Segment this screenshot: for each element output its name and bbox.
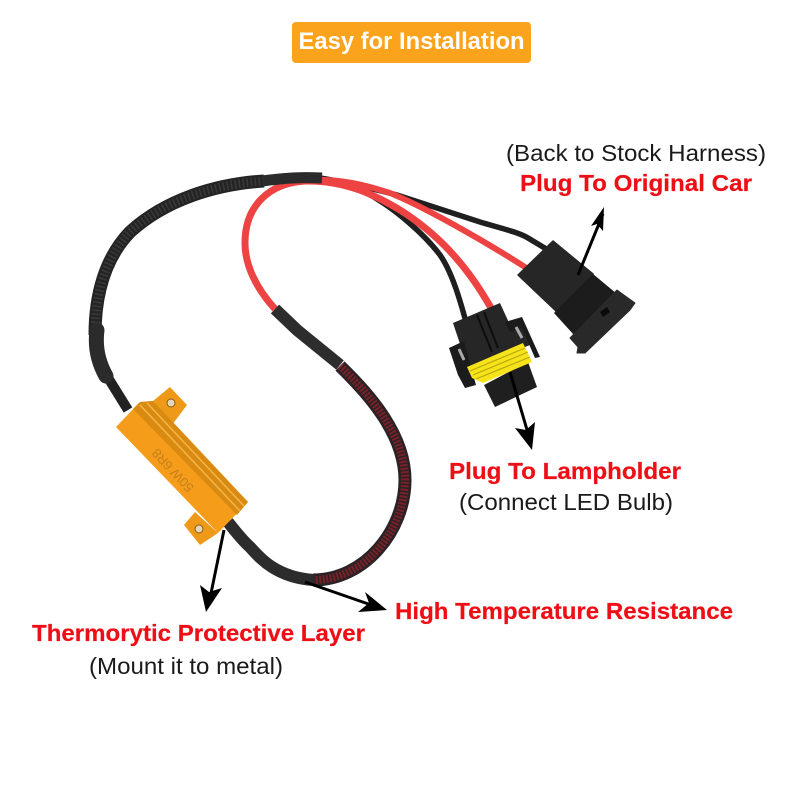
arrow: to protective layer [200, 530, 224, 612]
label: high temperature resistance: High Temperature Resistance [395, 598, 733, 624]
red wires loop to lampholder [245, 181, 491, 309]
arrow: to high temperature braid [305, 582, 387, 612]
lampholder connector [449, 303, 540, 407]
heat shrink lower joint [228, 522, 314, 580]
label: plug to lampholder: Plug To Lampholder [449, 458, 681, 484]
title badge [292, 22, 531, 63]
label: mount it to metal: (Mount it to metal) [89, 653, 283, 679]
label: back to stock harness: (Back to Stock Harness) [506, 140, 766, 166]
heat shrink upper joints [96, 178, 322, 410]
red wire to car plug [300, 180, 528, 269]
yellow seal [467, 343, 532, 383]
title badge: Easy for Installation [298, 28, 524, 55]
black wire to car plug [320, 178, 548, 250]
big connector: plug to original car [518, 241, 635, 353]
heat shrink at red loop [275, 309, 340, 365]
resistor marking: 50W 6R8 [149, 445, 197, 495]
red braided sleeve [313, 366, 405, 580]
arrow: to original car plug [578, 207, 604, 275]
arrow: to lampholder [510, 372, 535, 450]
label: thermorytic protective layer: Thermorytic Protective Layer [32, 620, 365, 646]
label: plug to original car: Plug To Original Car [520, 170, 752, 196]
illustration: load resistor wiring harness [95, 178, 635, 580]
gold resistor [116, 387, 248, 545]
braided black sleeve [95, 181, 264, 335]
black wire to lampholder [365, 192, 466, 322]
label: connect LED bulb: (Connect LED Bulb) [459, 489, 673, 515]
